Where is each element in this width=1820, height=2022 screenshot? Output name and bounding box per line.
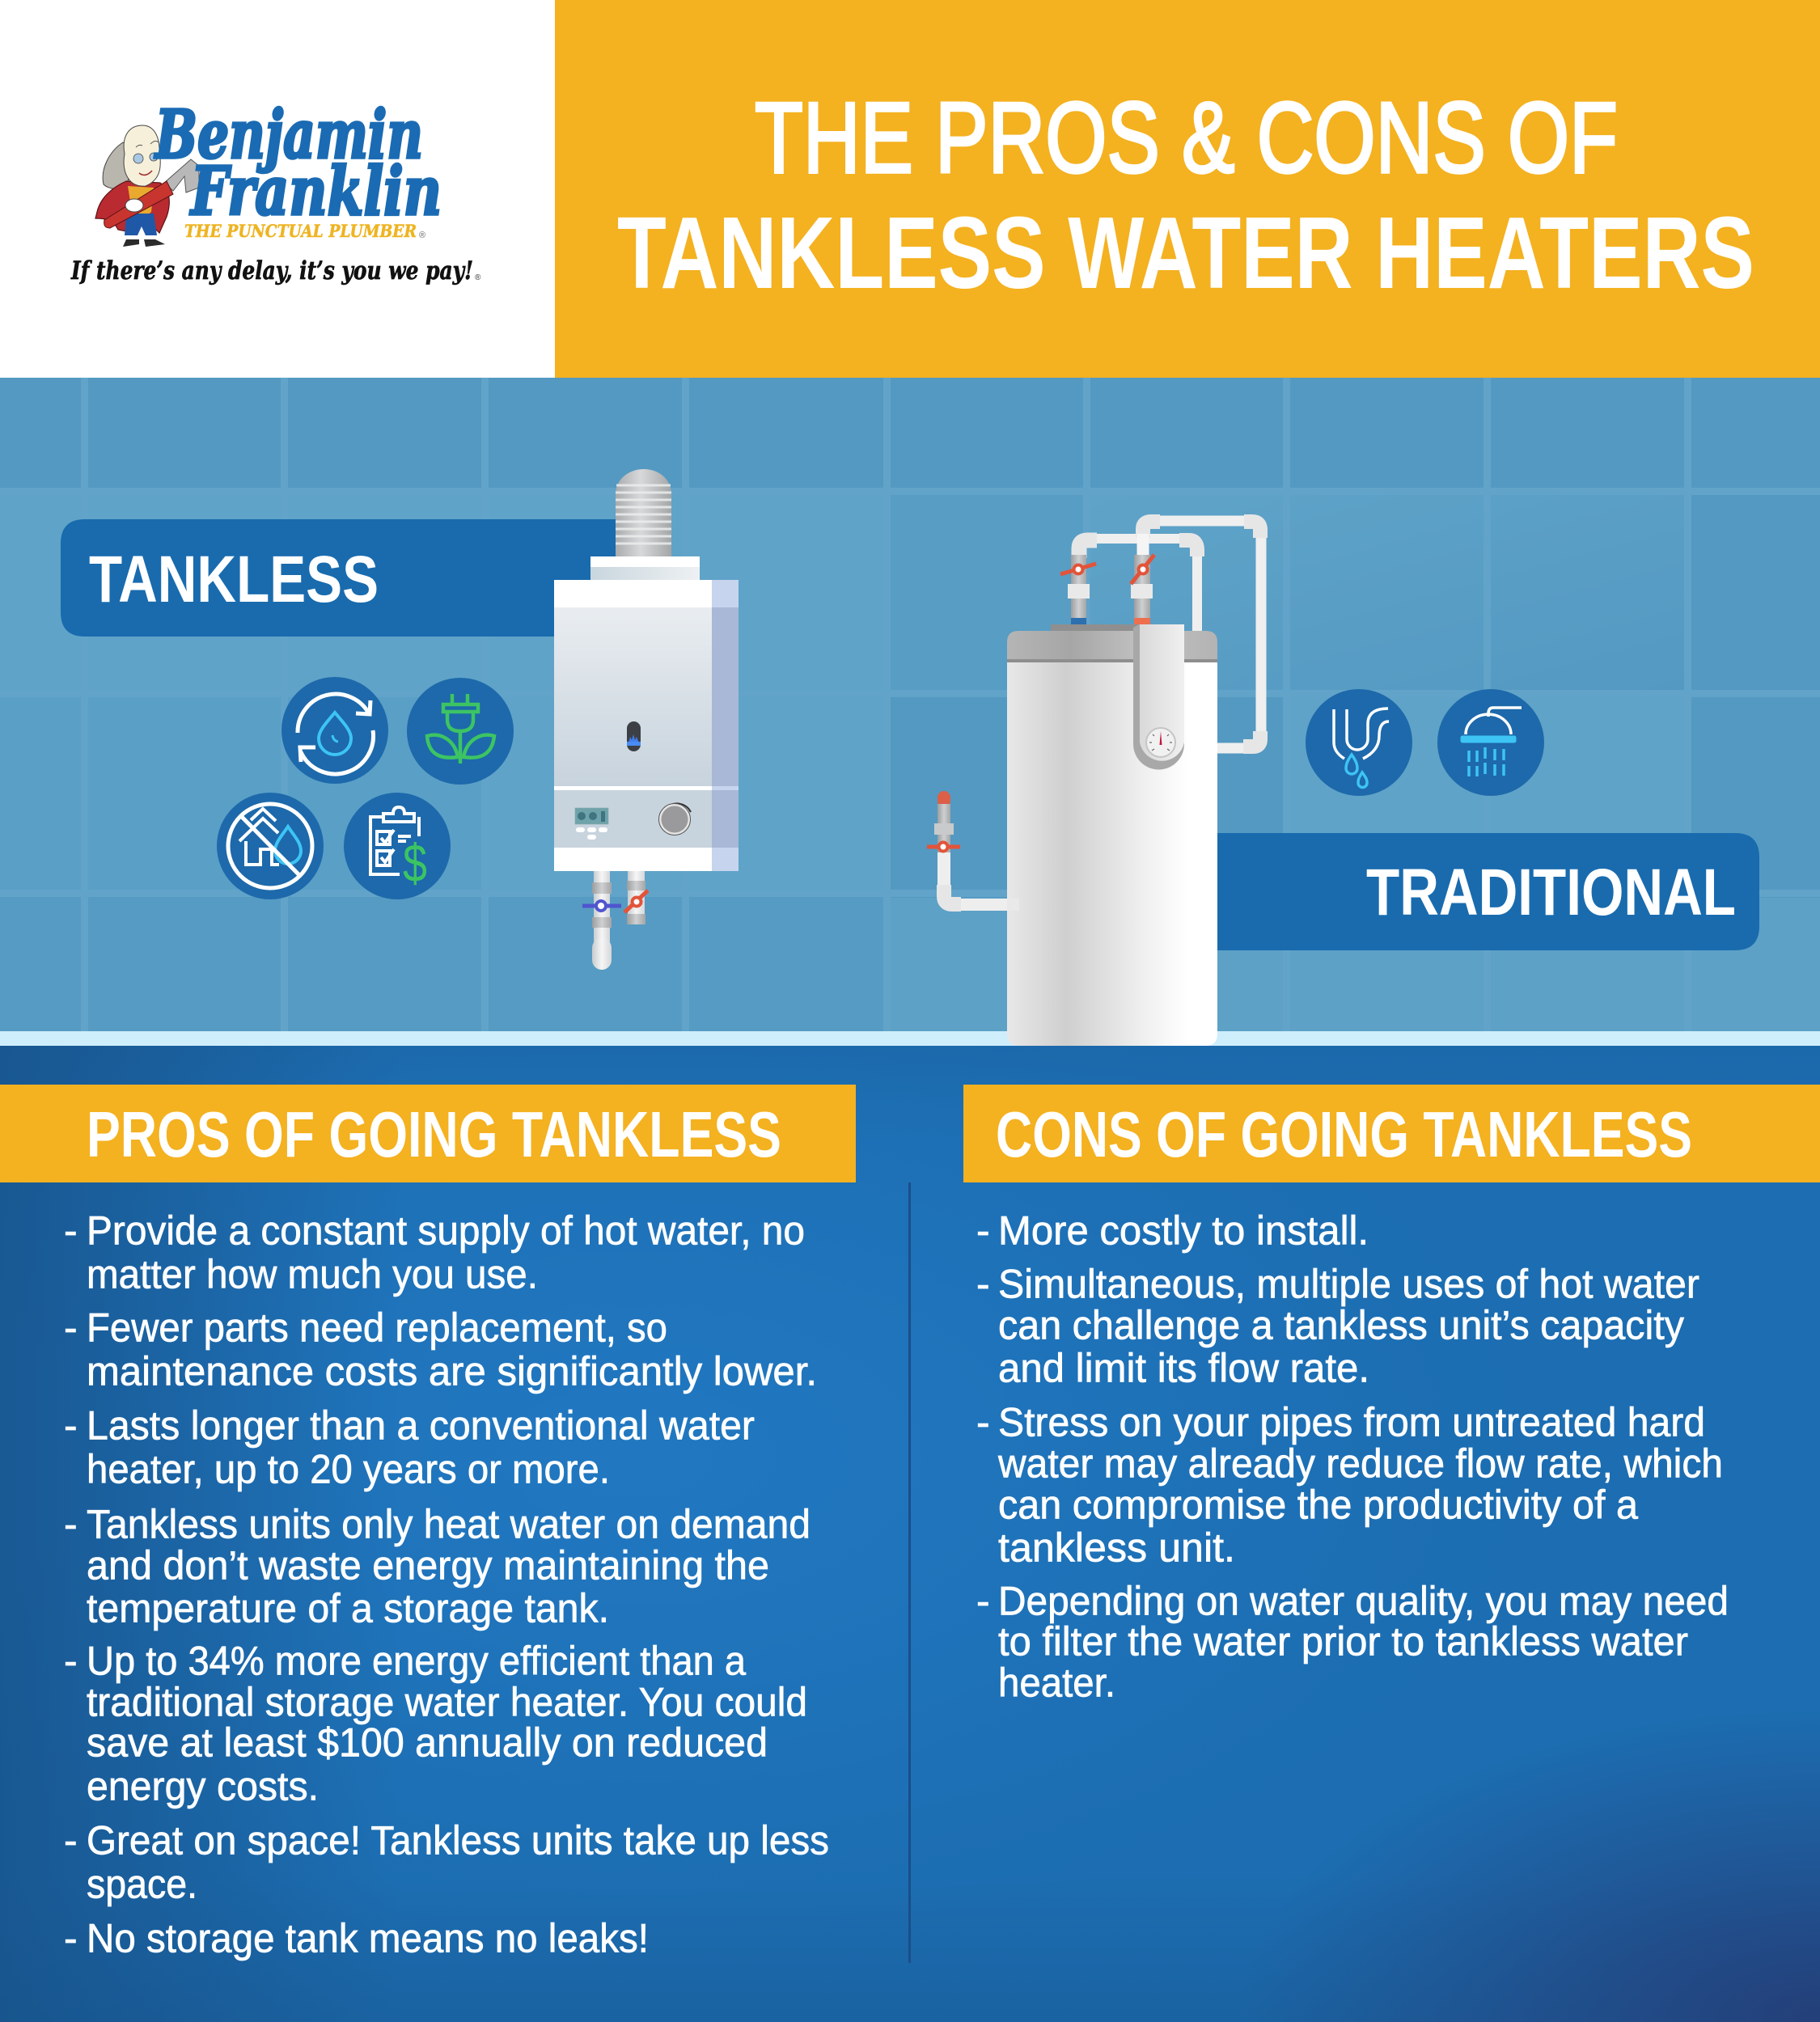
icon: checklist with dollar [344, 793, 451, 899]
heading: pros: PROS OF GOING TANKLESS [87, 1098, 781, 1170]
illustration: tankless water heater [554, 469, 739, 970]
text block: pros list: - [64, 1818, 78, 1863]
text block: cons list: - [976, 1579, 990, 1624]
text block: cons list [976, 1208, 1729, 1705]
icon: plug with leaves [407, 678, 514, 785]
shutoff fittings [1060, 555, 1154, 625]
text block: cons list: Simultaneous, multiple uses of hot water [998, 1262, 1699, 1307]
text block: cons list: can compromise the productivity of a [998, 1482, 1638, 1527]
title: THE PROS & CONS OF [755, 82, 1618, 194]
logo wordmark: Franklin [189, 153, 442, 231]
text block: pros list: Provide a constant supply of hot water, no [87, 1208, 805, 1254]
header: white logo panel [0, 0, 555, 378]
text block: pros list: traditional storage water heater. You could [87, 1679, 807, 1724]
heater body [554, 580, 739, 871]
icon: shower head [1437, 689, 1544, 796]
text block: pros list: and don’t waste energy maintaining the [87, 1543, 769, 1588]
text block: pros list: - [64, 1915, 78, 1961]
text block: cons list: - [976, 1208, 990, 1254]
flame window [627, 721, 641, 751]
thermostat panel [1133, 624, 1184, 770]
logo wordmark [154, 96, 442, 241]
text block: cons list: Stress on your pipes from untreated hard [998, 1399, 1705, 1445]
lower blue panel [0, 1046, 1820, 2022]
side drain pipe [927, 791, 1011, 911]
text block: cons list: Depending on water quality, you may need [998, 1579, 1729, 1624]
rear pipes [1079, 521, 1261, 748]
text block: pros list: - [64, 1501, 78, 1546]
icon: water recycling [281, 677, 388, 784]
header: yellow title panel [555, 0, 1820, 378]
text block: pros list: space. [87, 1862, 197, 1907]
text block: pros list: energy costs. [87, 1763, 319, 1808]
label: traditional: TRADITIONAL [1366, 856, 1736, 929]
text block: pros list: - [64, 1639, 78, 1684]
text block: cons list: heater. [998, 1660, 1115, 1705]
text block: cons list: - [976, 1262, 990, 1307]
text block: pros list: temperature of a storage tank. [87, 1585, 609, 1631]
text block: cons list: water may already reduce flow rate, which [997, 1441, 1723, 1487]
label: tankless: TANKLESS [89, 543, 379, 616]
text block: cons list: to filter the water prior to tankless water [998, 1619, 1688, 1665]
title [617, 82, 1754, 310]
logo mascot [95, 125, 199, 247]
text block: pros list: Tankless units only heat water on demand [87, 1501, 811, 1546]
column divider [908, 1182, 911, 1963]
floor strip [0, 1031, 1820, 1046]
logo tagline: If there’s any delay, it’s you we pay! [70, 256, 473, 286]
text block: pros list: No storage tank means no leaks! [87, 1915, 649, 1961]
text block: pros list [64, 1208, 829, 1961]
text block: cons list: tankless unit. [998, 1525, 1235, 1571]
label: tankless [61, 519, 627, 637]
outlet pipes and valves [582, 871, 648, 970]
logo wordmark: ® [419, 231, 425, 240]
text block: cons list: and limit its flow rate. [998, 1346, 1369, 1391]
tiled wall background [0, 378, 1820, 1031]
control knob [658, 803, 691, 835]
logo: Benjamin Franklin The Punctual Plumber [70, 96, 481, 286]
text block: pros list: maintenance costs are significantly lower. [87, 1349, 817, 1394]
text block: cons list: - [976, 1399, 990, 1445]
illustration: traditional tank water heater [927, 521, 1261, 1046]
icon: no leaking house [217, 793, 324, 899]
control display [575, 808, 608, 840]
text block: pros list: - [64, 1402, 78, 1448]
text block: cons list: More costly to install. [998, 1208, 1369, 1254]
heading: pros [0, 1085, 856, 1182]
logo wordmark: THE PUNCTUAL PLUMBER [184, 221, 417, 241]
text block: cons list: can challenge a tankless unit’s capacity [998, 1302, 1684, 1347]
text block: pros list: matter how much you use. [87, 1252, 538, 1297]
text block: pros list: Fewer parts need replacement, so [87, 1305, 667, 1351]
label: traditional [1217, 833, 1759, 950]
icon: checklist with dollar: $ [403, 833, 427, 893]
text block: pros list: Great on space! Tankless units take up less [87, 1818, 829, 1863]
text block: pros list: - [64, 1208, 78, 1254]
logo tagline: ® [475, 273, 481, 282]
flue [616, 469, 671, 556]
text block: pros list: - [64, 1305, 78, 1351]
text block: pros list: heater, up to 20 years or more. [87, 1446, 610, 1491]
text block: pros list: save at least $100 annually on reduced [87, 1720, 768, 1765]
icon: dripping drain pipe [1306, 689, 1412, 796]
tank [1007, 624, 1217, 1046]
text block: pros list: Lasts longer than a conventional water [87, 1402, 755, 1448]
collar [590, 556, 700, 581]
logo wordmark: Benjamin [154, 96, 423, 174]
text block: pros list: Up to 34% more energy efficient than a [87, 1639, 746, 1684]
